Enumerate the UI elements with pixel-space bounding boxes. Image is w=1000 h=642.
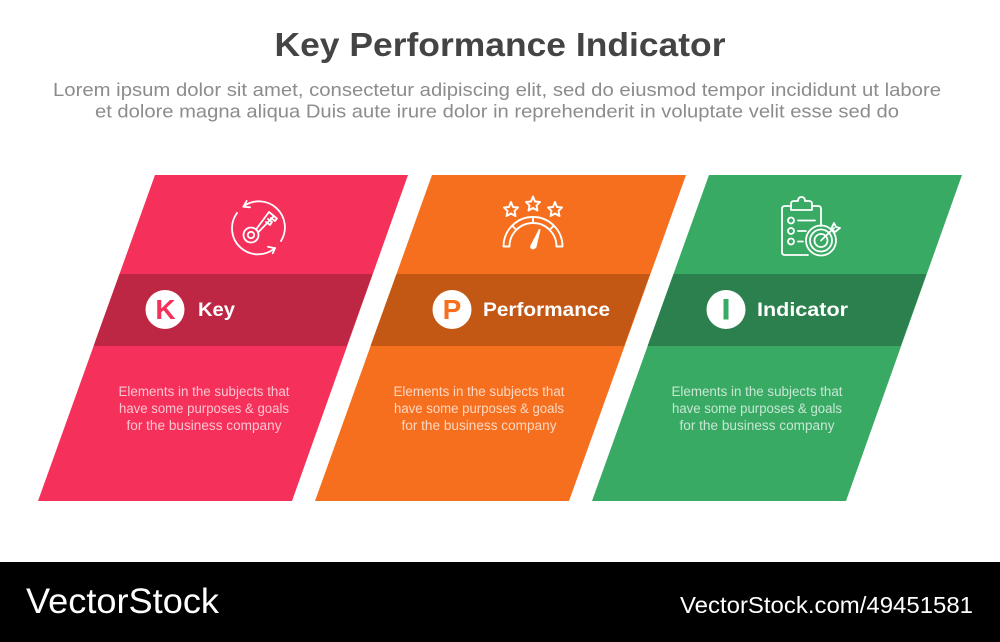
intro text: Lorem ipsum dolor sit amet, consectetur adipiscing elit, sed do eiusmod tempor incididunt ut labore: [53, 79, 941, 100]
icon: clipboard with target: [782, 197, 840, 256]
band: performance: [370, 274, 650, 346]
description: performance: for the business company: [402, 418, 557, 433]
description: indicator: Elements in the subjects that: [672, 384, 843, 399]
intro text: [53, 79, 941, 122]
description: key: Elements in the subjects that: [118, 384, 290, 399]
panel: indicator: [592, 175, 962, 501]
description: performance: [394, 384, 565, 433]
footer logo: VectorStock: [26, 582, 220, 621]
description: key: for the business company: [126, 418, 282, 433]
title: Key Performance Indicator: [274, 27, 726, 64]
band: key: [94, 274, 372, 346]
letter badge: K: K: [155, 294, 176, 325]
icon: gauge with stars: [504, 196, 562, 248]
label: Performance: Performance: [483, 299, 610, 321]
footer bar: [0, 562, 1000, 642]
description: indicator: have some purposes & goals: [672, 401, 842, 416]
panel: performance: [315, 175, 686, 501]
letter badge: I: [706, 290, 746, 329]
description: performance: have some purposes & goals: [394, 401, 564, 416]
letter badge: P: P: [443, 294, 461, 325]
letter badge: K: [146, 290, 184, 329]
description: indicator: for the business company: [680, 418, 835, 433]
panel: key: [38, 175, 408, 501]
footer id: VectorStock.com/49451581: [680, 592, 973, 618]
label: Key: Key: [198, 299, 235, 321]
label: Indicator: Indicator: [757, 299, 848, 321]
description: indicator: [672, 384, 843, 433]
description: performance: Elements in the subjects that: [394, 384, 565, 399]
band: indicator: [648, 274, 926, 346]
intro text: et dolore magna aliqua Duis aute irure dolor in reprehenderit in voluptate velit esse sed do: [95, 100, 899, 122]
description: key: [118, 384, 290, 433]
icon: key with cycle arrows: [232, 201, 285, 254]
description: key: have some purposes & goals: [119, 401, 289, 416]
letter badge: P: [432, 290, 472, 329]
